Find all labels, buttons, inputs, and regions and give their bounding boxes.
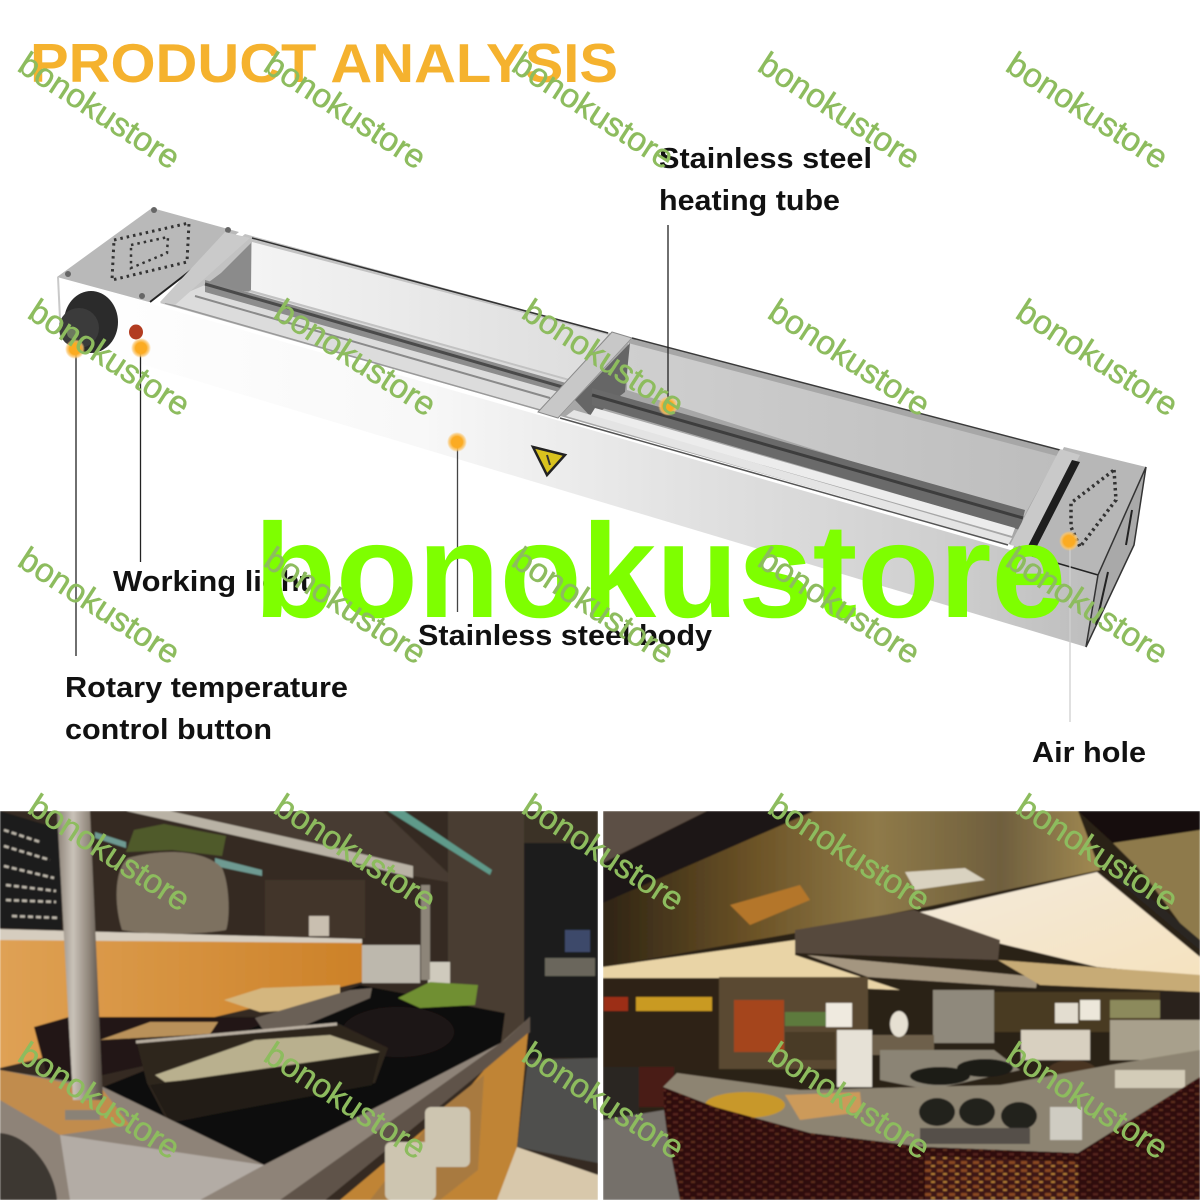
callout labels: control button [65, 714, 272, 746]
stove [880, 1050, 1097, 1090]
tiled watermarks: bonokustore [1000, 541, 1174, 672]
callout labels [65, 143, 1146, 769]
floor [603, 1110, 680, 1200]
front pan [136, 1023, 388, 1123]
teal back strips [95, 832, 126, 848]
plates stack [362, 945, 420, 983]
callout labels: Rotary temperature [65, 672, 348, 704]
back pans and food [34, 982, 478, 1087]
steel counter top [0, 1017, 530, 1200]
callout labels: Working light [113, 566, 310, 598]
trough section 2 [560, 338, 1060, 545]
mosaic counter base [663, 1077, 1200, 1200]
working light [129, 324, 143, 340]
cup on shelf [309, 916, 329, 936]
floor [517, 1058, 598, 1163]
right end plate [1010, 447, 1146, 575]
photo: buffet counter [0, 811, 598, 1200]
tiled watermarks: bonokustore [22, 293, 196, 424]
tiled watermarks: bonokustore [12, 1036, 186, 1167]
blue bokeh lights [565, 930, 590, 952]
shelf of jars [603, 978, 719, 1120]
trough section 1 [160, 232, 628, 412]
right side face [1086, 467, 1146, 647]
marker dots [65, 338, 1079, 551]
front face of body [57, 277, 1098, 647]
tiled watermarks: bonokustore [258, 46, 432, 177]
control knob [59, 291, 118, 353]
tiled watermarks: bonokustore [516, 788, 690, 919]
tiled watermarks: bonokustore [516, 1036, 690, 1167]
tiled watermarks: bonokustore [1000, 46, 1174, 177]
glass canopy [126, 811, 448, 882]
warning triangle [533, 447, 565, 475]
tiled watermarks: bonokustore [506, 541, 680, 672]
range hood [795, 910, 1200, 992]
tiled watermarks: bonokustore [752, 541, 926, 672]
wood shelving below counter [340, 1033, 528, 1200]
gold reflective canopy [603, 811, 1100, 967]
tiled watermarks: bonokustore [762, 788, 936, 919]
title: PRODUCT ANALYSIS [30, 32, 618, 94]
large brand watermark: bonokustore [254, 497, 1066, 646]
leader lines [76, 225, 1070, 722]
chalkboard [0, 811, 62, 930]
callout labels: heating tube [659, 185, 840, 217]
product illustration: heating unit [57, 207, 1146, 647]
tiled watermarks: bonokustore [1010, 788, 1184, 919]
tiled watermarks: bonokustore [762, 1036, 936, 1167]
tiled watermarks: bonokustore [1010, 293, 1184, 424]
food and pots [705, 1070, 1185, 1144]
middle crossbar [538, 332, 632, 418]
counter top [663, 1050, 1200, 1153]
callout labels: Stainless steel [659, 143, 872, 175]
tiled watermarks: bonokustore [12, 541, 186, 672]
chefs [826, 1000, 1100, 1087]
tiled watermarks: bonokustore [516, 293, 690, 424]
tiled watermarks: bonokustore [268, 293, 442, 424]
kitchen back wall [868, 990, 1200, 1060]
callout labels: Stainless steel body [418, 620, 712, 652]
tiled watermarks: bonokustore [268, 788, 442, 919]
tiled watermarks: bonokustore [258, 1036, 432, 1167]
tiled watermarks: bonokustore [1000, 1036, 1174, 1167]
glass case with roast ducks [719, 977, 868, 1069]
tiled watermarks: bonokustore [22, 788, 196, 919]
white ceiling [914, 872, 1200, 977]
stone planter [117, 824, 229, 934]
left top plate [57, 207, 239, 340]
tiled watermarks: bonokustore [506, 46, 680, 177]
tiled watermarks: bonokustore [762, 293, 936, 424]
tiled watermarks: bonokustore [258, 541, 432, 672]
tiled watermarks: bonokustore [752, 46, 926, 177]
photo: open kitchen [603, 811, 1200, 1200]
wood panel [0, 940, 362, 1068]
black counter tray [103, 985, 505, 1165]
tiled watermarks: bonokustore [12, 46, 186, 177]
callout labels: Air hole [1032, 737, 1146, 769]
support pole [57, 811, 103, 1100]
